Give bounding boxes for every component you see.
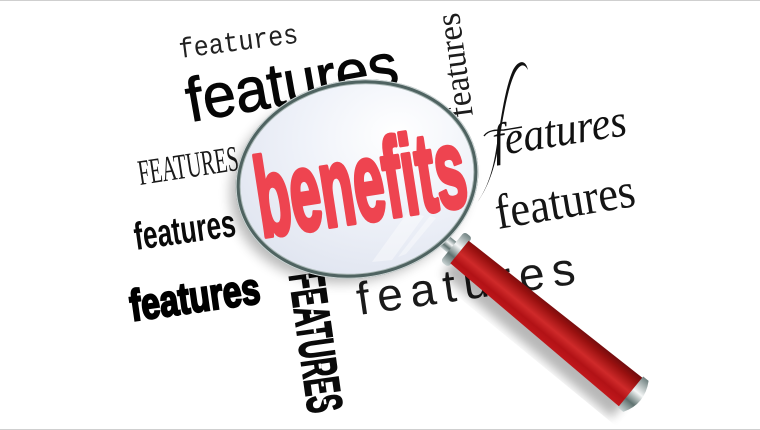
handle collar (441, 232, 472, 267)
handle neck (431, 228, 457, 253)
word: condensed features: features (131, 202, 238, 259)
handle end cap (618, 377, 653, 416)
word: italic swash features: features (489, 94, 630, 166)
handle grip (448, 238, 643, 407)
word: vertical serif features: features (428, 11, 481, 120)
magnifying glass (215, 60, 653, 418)
word: benefits: benefits (247, 105, 474, 261)
word: serif features right: features (491, 162, 639, 240)
word: large sans features: features (180, 31, 403, 136)
word: italic swash features (476, 62, 630, 204)
word: spaced features behind handle: features (353, 242, 578, 325)
word: monospace features: features (177, 21, 300, 67)
handle (440, 231, 653, 416)
lens (220, 60, 494, 298)
lens glare (372, 212, 436, 262)
word: serif capitals FEATURES: FEATURES (135, 138, 241, 193)
shadows (215, 71, 632, 418)
word: heavy features: features (127, 264, 263, 331)
